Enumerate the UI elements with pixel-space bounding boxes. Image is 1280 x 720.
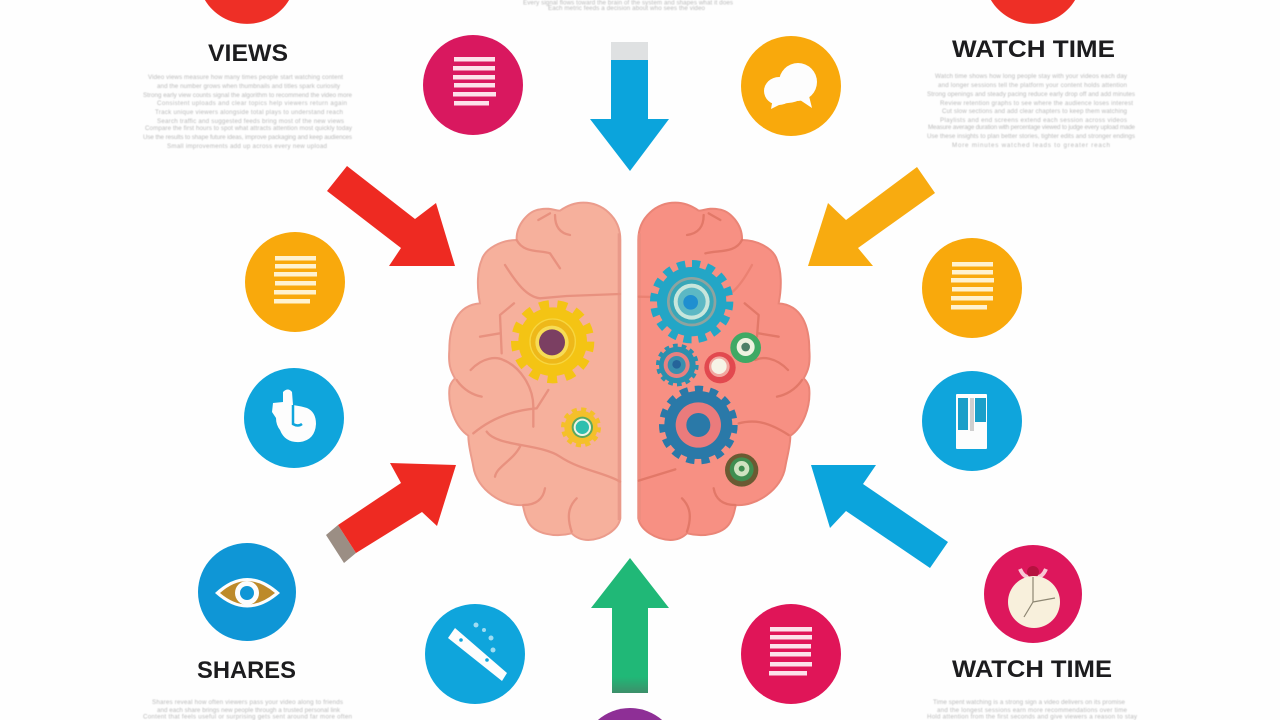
icon: blue document	[922, 371, 1022, 471]
icon: red circle	[205, 0, 289, 24]
text block: watch time description: Review retention graphs to see where the audience loses interest	[940, 100, 1133, 107]
text block: views description: and the number grows when thumbnails and titles spark curiosity	[157, 83, 341, 90]
text block: shares description: and each share brings new people through a trusted personal link	[157, 707, 341, 714]
text block: shares description	[143, 699, 353, 720]
heading: watch time: WATCH TIME	[952, 656, 1112, 683]
text block: shares description: Shares reveal how often viewers pass your video along to friends	[152, 699, 343, 706]
text block: views description: Use the results to shape future ideas, improve packaging and keep audiences	[143, 134, 352, 141]
left hemisphere	[449, 203, 621, 540]
icon: purple circle	[598, 708, 662, 720]
text block: views description: Video views measure how many times people start watching content	[148, 74, 343, 81]
text block: watch time description: Strong openings and steady pacing reduce early drop off and add minutes	[927, 91, 1135, 98]
heading: watch time: WATCH TIME	[952, 36, 1115, 63]
panel: watch time (bottom right)	[927, 545, 1138, 720]
gear: small dark	[725, 453, 758, 487]
text block: watch time description: Cut slow sections and add clear chapters to keep them watching	[942, 108, 1128, 115]
icon: blue strip	[425, 604, 525, 704]
text block: views description: Track unique viewers alongside total plays to understand reach	[155, 109, 344, 116]
top centre caption: Each metric feeds a decision about who sees the video	[548, 5, 706, 12]
text block: watch time description: Watch time shows how long people stay with your videos each day	[935, 73, 1128, 80]
gear: small yellow	[563, 410, 599, 445]
gear: medium teal	[658, 346, 697, 384]
text block: watch time description	[927, 699, 1138, 720]
panel: views (top left)	[143, 0, 353, 150]
panel: shares (bottom left)	[143, 543, 353, 720]
heading: views: VIEWS	[208, 40, 288, 67]
icon: pink stopwatch	[984, 545, 1082, 643]
text block: views description: Compare the first hours to spot what attracts attention most quickly today	[145, 125, 353, 132]
text block: watch time description: Time spent watching is a strong sign a video delivers on its promise	[933, 699, 1126, 706]
right hemisphere	[638, 203, 810, 540]
panel: watch time (top right)	[927, 0, 1136, 149]
icon: orange list	[245, 232, 345, 332]
icon: blue hand	[244, 368, 344, 468]
text block: watch time description: Use these insights to plan better stories, tighter edits and stronger endings	[927, 133, 1135, 140]
text block: watch time description	[927, 73, 1136, 149]
gear: red	[704, 352, 736, 383]
gear: green	[730, 332, 761, 363]
text block: watch time description: and longer sessions tell the platform your content holds attention	[938, 82, 1128, 89]
arrow: red to brain from bottom left	[326, 463, 456, 563]
icon: yellow chat bubbles	[741, 36, 841, 136]
gear: large blue	[663, 390, 734, 460]
icon: pink list	[741, 604, 841, 704]
icon: red circle	[991, 0, 1075, 24]
arrow: red to brain from top left	[327, 166, 455, 266]
text block: views description: Strong early view counts signal the algorithm to recommend the video more	[143, 92, 353, 99]
arrow: yellow to brain from top right	[808, 167, 935, 266]
icon: blue eye	[198, 543, 296, 641]
icon: yellow list	[922, 238, 1022, 338]
gear: large teal	[654, 264, 729, 339]
illustration: brain with gears	[449, 203, 810, 540]
text block: views description: Consistent uploads and clear topics help viewers return again	[157, 100, 348, 107]
top centre caption	[523, 0, 733, 12]
gear: large yellow	[515, 304, 590, 379]
text block: watch time description: More minutes watched leads to greater reach	[952, 142, 1111, 149]
text block: watch time description: Playlists and end screens extend each session across videos	[940, 117, 1127, 124]
arrow: green up	[591, 558, 669, 693]
arrow: blue to brain from bottom right	[811, 465, 948, 568]
text block: views description: Small improvements add up across every new upload	[167, 143, 328, 150]
text block: views description: Search traffic and suggested feeds bring most of the new views	[157, 118, 344, 125]
text block: views description	[143, 74, 353, 150]
heading: shares: SHARES	[197, 657, 296, 684]
arrow: blue down	[590, 42, 669, 171]
icon: pink list	[423, 35, 523, 135]
text block: watch time description: Measure average duration with percentage viewed to judge every upload made	[928, 124, 1136, 131]
text block: watch time description: and the longest sessions earn more recommendations over time	[937, 707, 1128, 714]
